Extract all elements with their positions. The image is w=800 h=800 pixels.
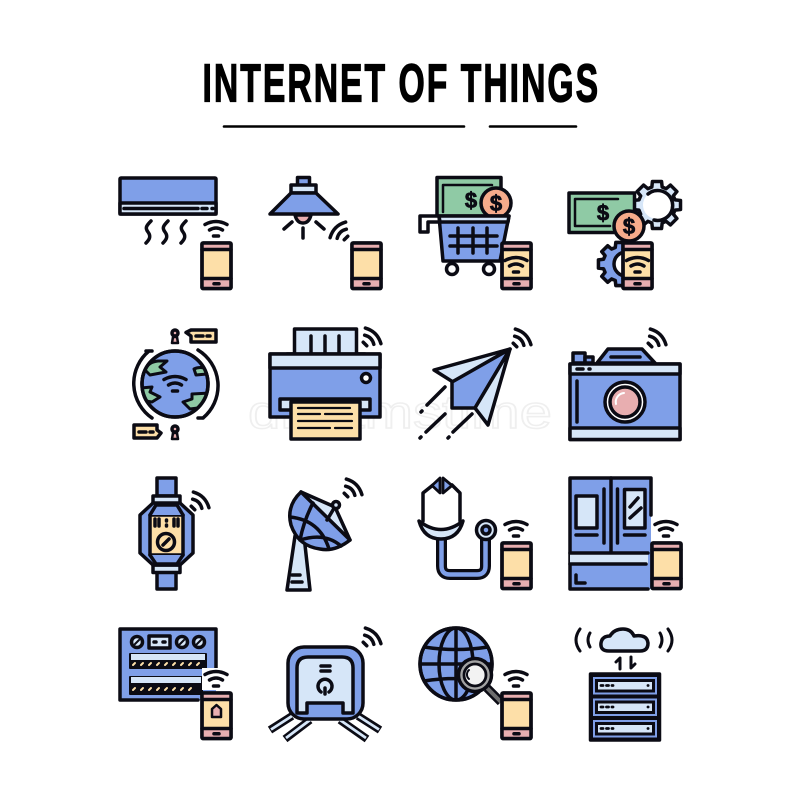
icon: smart lamp — [270, 178, 381, 288]
icon: money and gears with phone: $ — [623, 214, 635, 239]
icon: money and gears with phone — [569, 181, 681, 288]
icon: smart control panel — [120, 629, 231, 738]
watermark: dreamstime — [248, 386, 552, 438]
icon: cloud server — [576, 629, 672, 740]
icon: shopping cart with money: $ — [490, 191, 502, 216]
infographic canvas — [118, 63, 683, 742]
icon: camera — [570, 327, 680, 440]
icon: stethoscope — [419, 478, 531, 588]
icon: shopping cart with money: $ — [465, 188, 477, 213]
title underline — [224, 125, 576, 128]
icon: global search — [420, 628, 531, 738]
icon: smart watch — [140, 478, 211, 589]
icon: robot vacuum — [270, 626, 383, 739]
icon: connected globe — [134, 330, 218, 439]
title: INTERNET OF THINGS — [202, 55, 598, 113]
icon: wireless printer — [270, 326, 383, 439]
icon: money and gears with phone: $ — [597, 200, 609, 226]
icon: paper plane — [420, 327, 533, 438]
icon: smart fridge — [570, 478, 681, 589]
icon: air conditioner — [120, 178, 231, 288]
icon: shopping cart with money — [420, 178, 531, 288]
icon: satellite dish — [287, 477, 364, 590]
